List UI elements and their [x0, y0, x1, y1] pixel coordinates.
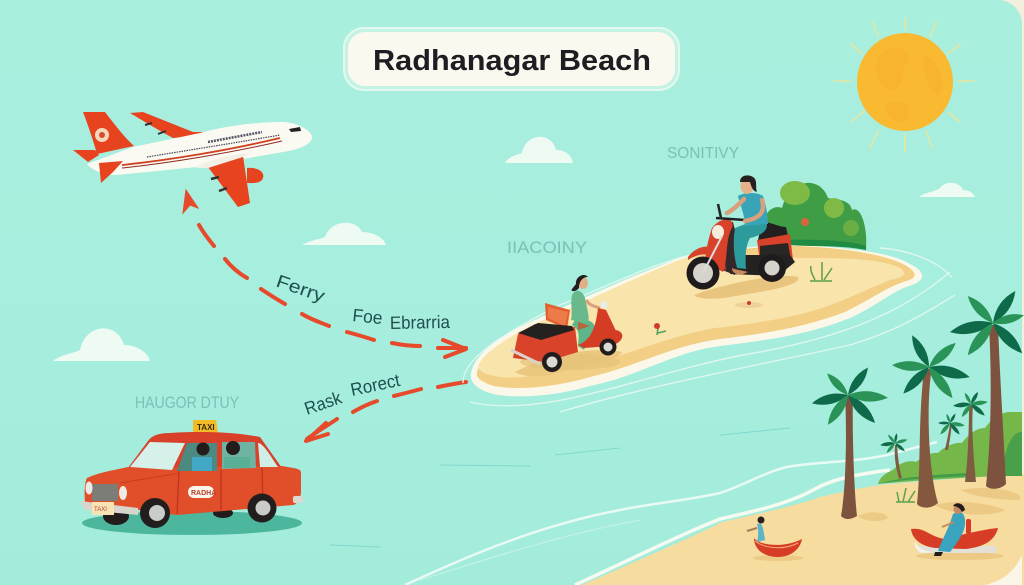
route labels: Rask [302, 387, 345, 419]
palm fronds [811, 288, 1024, 454]
dashed route: island to taxi [306, 382, 466, 441]
place name labels: SONITIVY [667, 145, 739, 162]
taxi: TAXI [94, 507, 107, 513]
title banner: Radhanagar Beach [373, 45, 651, 77]
clouds [53, 137, 975, 361]
place name labels [135, 145, 739, 412]
place name labels: HAUGOR DTUY [135, 393, 239, 412]
bushes on lower beach [878, 412, 1022, 484]
dashed route: airport to island [183, 190, 466, 357]
place name labels: IIACOINY [507, 238, 587, 257]
route labels [274, 271, 451, 419]
palm trees [811, 288, 1024, 519]
person with small red boat [747, 516, 802, 557]
route labels: Foe [352, 305, 384, 328]
island [463, 245, 955, 412]
route labels: Ferry [274, 271, 327, 306]
wave lines [330, 428, 937, 585]
person on red jet ski [911, 503, 998, 556]
icon: sun [834, 18, 974, 152]
route labels: Ebrarria [390, 312, 451, 333]
motorcycle with rider [686, 175, 795, 290]
taxi: RADHA [191, 490, 216, 497]
scooter cart with rider [511, 275, 622, 372]
taxi [80, 420, 303, 535]
route labels: Rorect [349, 370, 402, 400]
title banner [344, 28, 679, 90]
icon: airplane [73, 112, 312, 207]
taxi: TAXI [197, 423, 215, 432]
bush on island [763, 181, 866, 250]
grass tuft [896, 488, 915, 502]
lower beach [582, 474, 1024, 585]
